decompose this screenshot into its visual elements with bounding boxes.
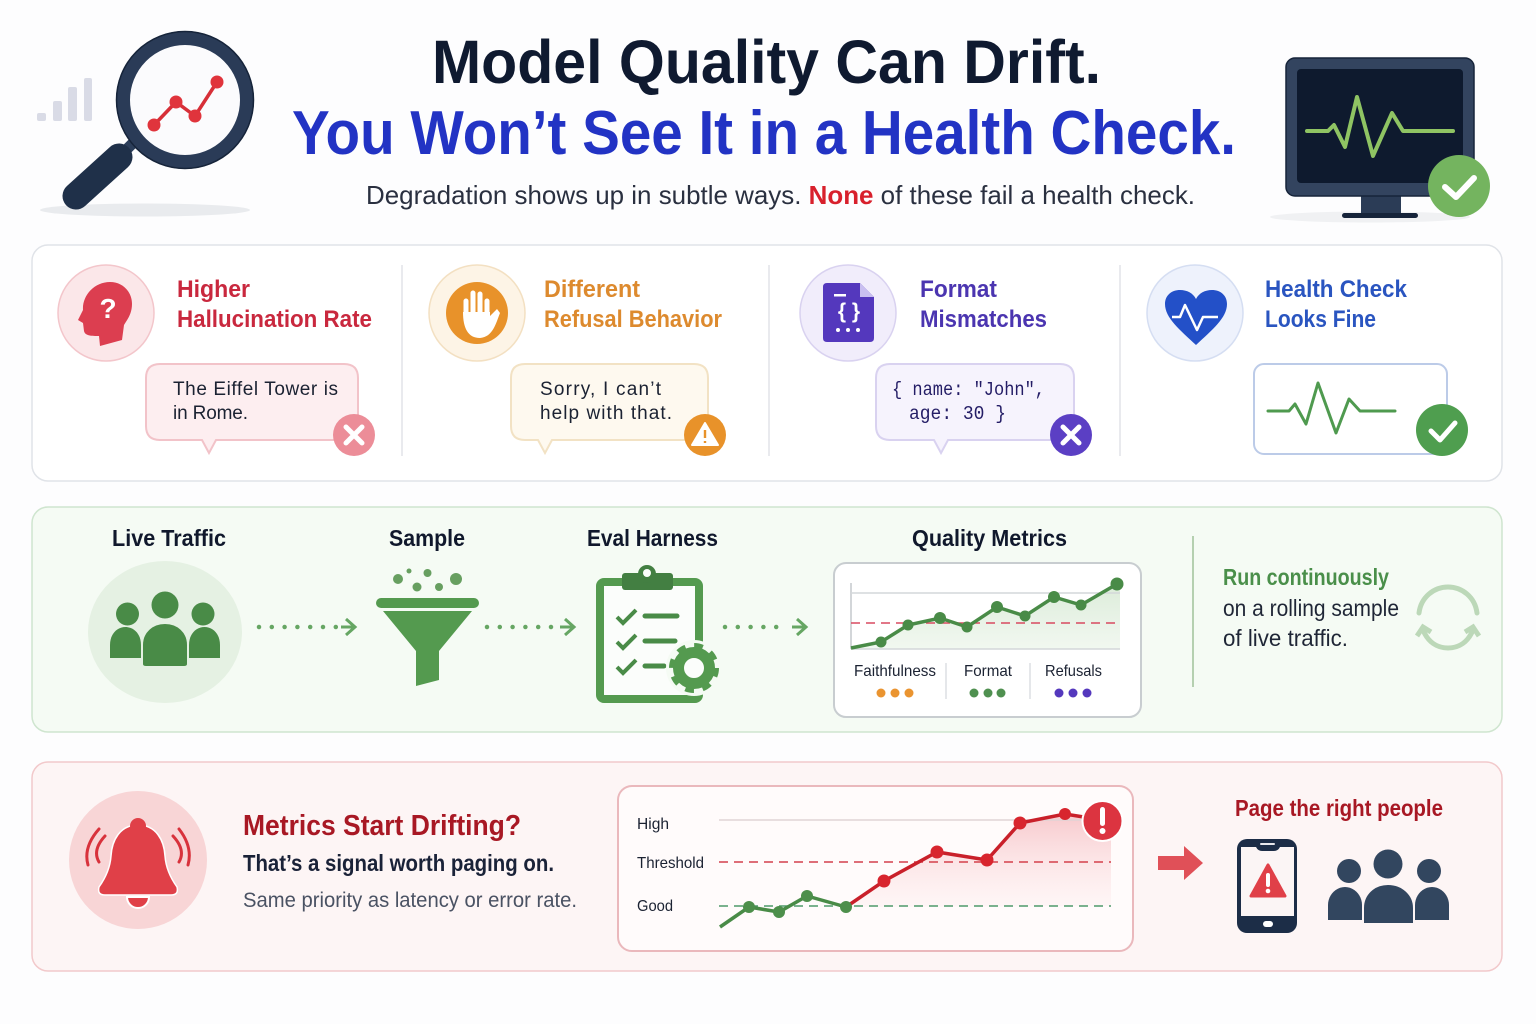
step: live traffic: Live Traffic [112,525,226,551]
symptom: higher hallucination rate [58,265,375,456]
icon: ringing bell [69,791,207,929]
symptom: format mismatches [800,265,1092,456]
header [37,28,1490,222]
subtitle: Degradation shows up in subtle ways. None of these fail a health check. [366,180,1195,210]
step: eval harness clipboard: Eval Harness [587,525,718,551]
icon: heart with pulse [1147,265,1243,361]
icon: stop hand [429,265,525,361]
status: health check looks fine [1147,265,1468,456]
callout text: That’s a signal worth paging on. [243,850,554,876]
title [292,28,1236,168]
speech bubble: wrong fact: in Rome. [173,403,248,424]
step: sample funnel: Sample [389,525,465,551]
page the right people [1235,795,1449,933]
speech bubble: malformed JSON: { name: "John", [892,379,1045,401]
panel: continuous evaluation pipeline [32,507,1502,732]
icon: cycle arrows [1417,587,1479,648]
step: sample funnel [376,525,479,686]
icon: monitor with healthy pulse [1270,58,1490,222]
note: run continuously: of live traffic. [1223,625,1348,651]
speech bubble: refusal: Sorry, I can’t [540,379,662,400]
metric legend: Format [964,663,1013,680]
speech bubble: malformed JSON [876,364,1092,456]
note: run continuously: on a rolling sample [1223,595,1399,621]
icon: head with question mark [58,265,154,361]
step: eval harness clipboard [587,525,722,699]
heading: Different [544,276,640,303]
speech bubble: refusal [511,364,726,456]
metric legend [854,663,1102,699]
heading: Looks Fine [1265,306,1376,333]
speech bubble: wrong fact: The Eiffel Tower is [173,379,338,400]
drift chart [618,786,1133,951]
arrow: traffic to sample [259,619,355,635]
heading: Health Check [1265,276,1408,303]
heading: Mismatches [920,306,1047,333]
title: Model Quality Can Drift. [432,28,1101,96]
callout text [243,810,577,912]
note: run continuously [1223,564,1399,651]
callout text: Metrics Start Drifting? [243,810,521,842]
callout text: Same priority as latency or error rate. [243,889,577,912]
heading: Format [920,276,997,303]
drift chart: Threshold [637,855,704,872]
icon: on-call team [1328,850,1449,924]
icon: alert badge [1082,801,1122,841]
panel: symptoms [32,245,1502,481]
icon: JSON document [800,265,896,361]
icon: magnifying glass with rising chart [37,32,254,216]
metric legend: Refusals [1045,663,1102,680]
heading: Hallucination Rate [177,306,372,333]
heading: Refusal Behavior [544,306,722,333]
arrow: harness to metrics [725,619,806,635]
metric legend: Faithfulness [854,663,936,680]
drift chart: High [637,816,669,833]
step: quality metrics [834,525,1141,717]
speech bubble: refusal: help with that. [540,403,672,424]
step: quality metrics: Quality Metrics [912,525,1067,551]
healthy pulse card [1254,364,1468,456]
drift chart: Good [637,898,673,915]
icon: phone with alert [1237,839,1297,933]
icon: JSON document: { } [838,300,860,323]
speech bubble: malformed JSON: age: 30 } [909,403,1006,425]
line chart card [834,563,1141,717]
icon: head with question mark: ? [99,293,117,324]
arrow: to paging [1158,846,1203,880]
title: You Won’t See It in a Health Check. [292,99,1236,168]
symptom: different refusal behavior [429,265,726,456]
note: run continuously: Run continuously [1223,564,1389,590]
speech bubble: wrong fact [146,364,375,456]
panel: alerting [32,762,1502,971]
step: live traffic [88,525,242,703]
heading: Higher [177,276,250,303]
page the right people: Page the right people [1235,795,1443,821]
arrow: sample to harness [487,619,574,635]
